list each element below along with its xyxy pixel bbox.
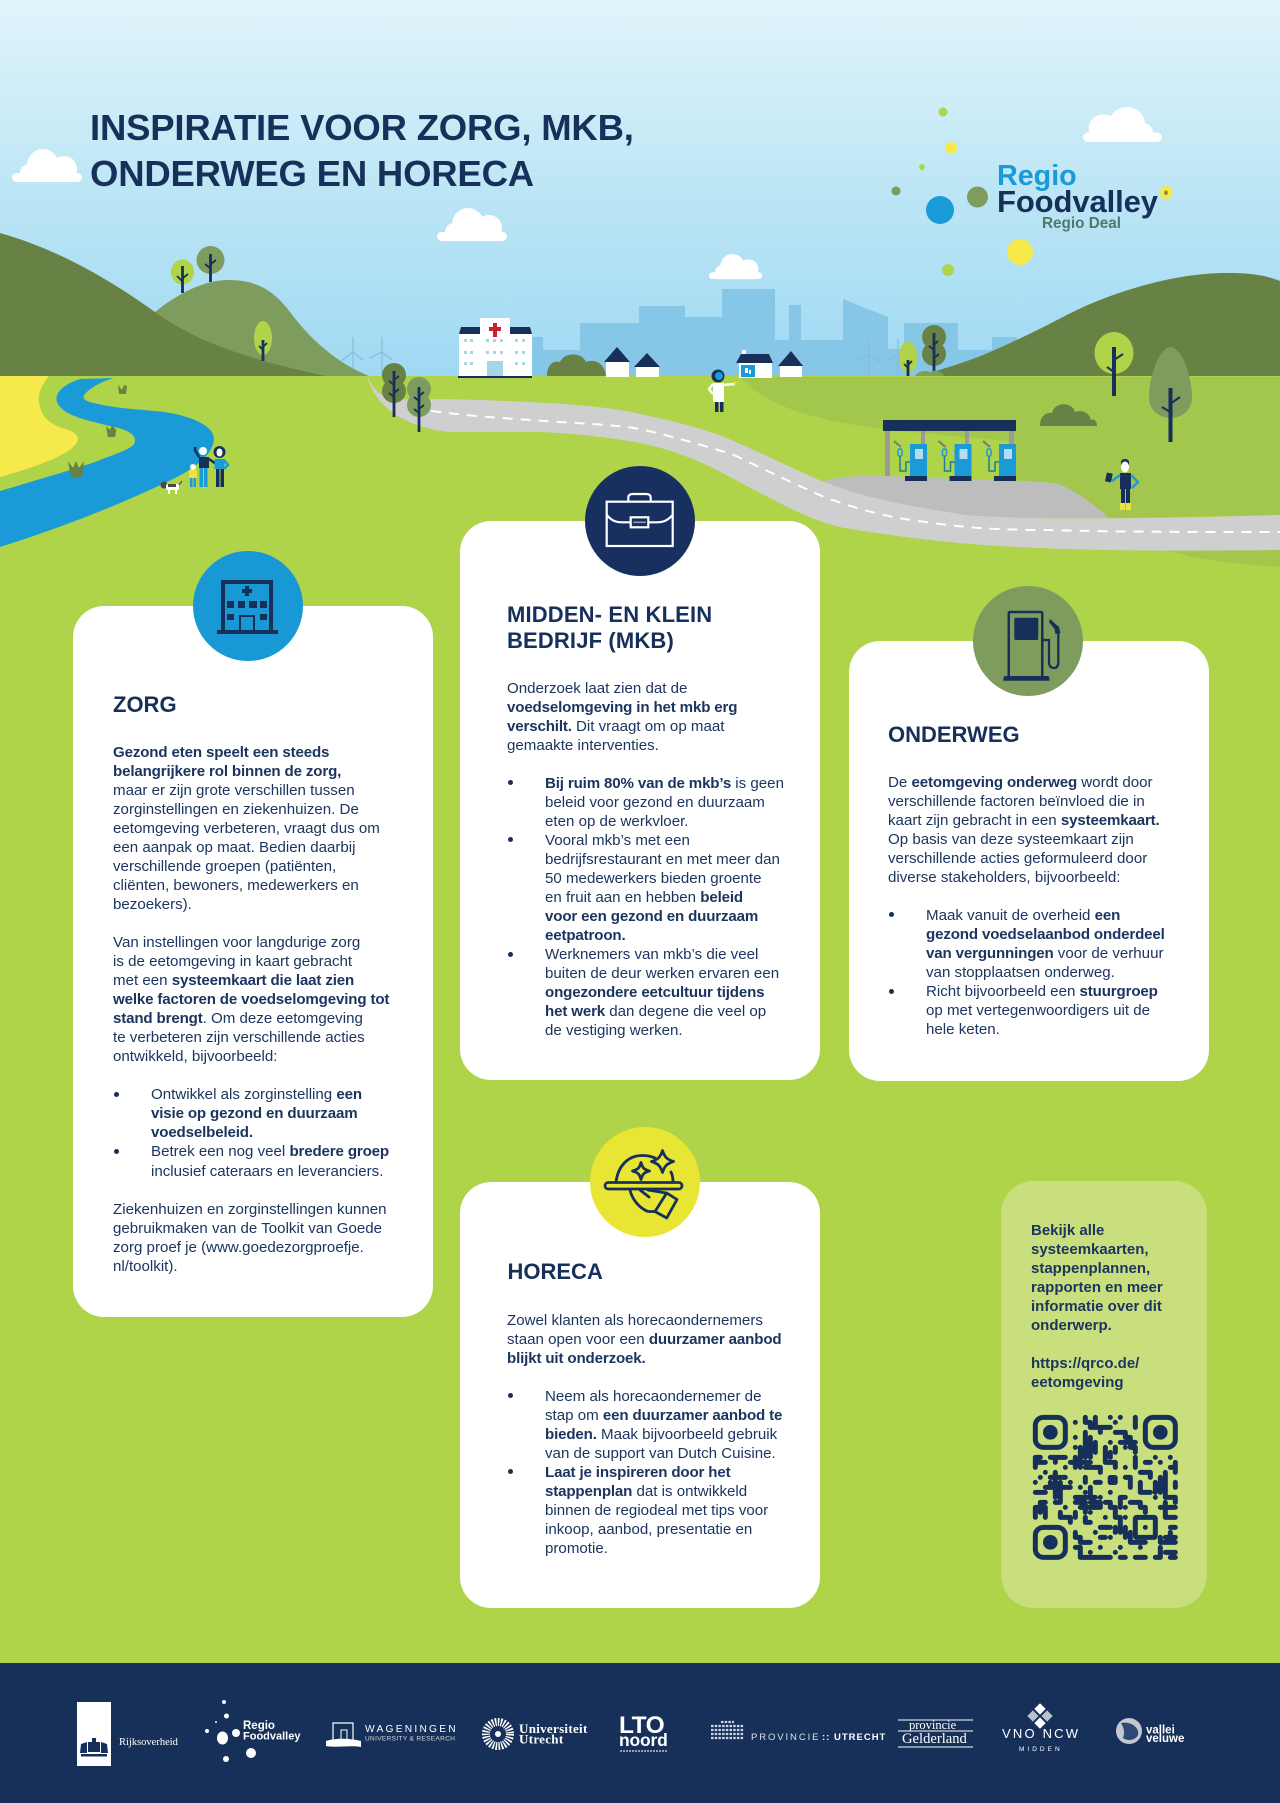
logo: Provincie Gelderland: Gelderland: [902, 1731, 968, 1747]
trees on left hills: [171, 246, 272, 361]
text: zorg body: voedselbeleid.: [151, 1124, 253, 1141]
logo: Provincie Utrecht: PROVINCIE: [751, 1732, 820, 1743]
logo: Provincie Gelderland: provincie: [909, 1718, 957, 1732]
icon: serving tray: [590, 1127, 700, 1237]
person: scientist: [709, 370, 736, 412]
text: onderweg body: op met vertegenwoordigers uit de: [926, 1002, 1150, 1019]
logo: LTO Noord: noord: [619, 1730, 668, 1750]
title: ONDERWEG EN HORECA: [90, 152, 534, 194]
text: mkb body: bedrijfsrestaurant en met meer dan: [545, 851, 780, 868]
text: call to action: systeemkaarten,: [1031, 1241, 1149, 1258]
text: mkb body: verschilt. Dit vraagt om op maat: [507, 718, 724, 735]
logo: Rijksoverheid: [77, 1702, 179, 1766]
text: mkb body: buiten de deur werken ervaren een: [545, 965, 779, 982]
logo: Regio Foodvalley Regio Deal: ®: [1164, 190, 1169, 197]
text: onderweg body: gezond voedselaanbod onderdeel: [926, 926, 1165, 943]
wind turbines: [341, 337, 908, 376]
text: horeca body: blijkt uit onderzoek.: [507, 1350, 646, 1367]
logo: Regio Foodvalley Regio Deal: [892, 108, 1172, 276]
cloud near skyline: [709, 254, 762, 279]
footer: partner logos: [0, 1663, 1280, 1803]
text: mkb body: Onderzoek laat zien dat de: [507, 680, 687, 696]
text: horeca body: stappenplan dat is ontwikkeld: [545, 1483, 747, 1500]
logo: Regio Foodvalley: [205, 1700, 301, 1762]
panel: zorg: [73, 551, 433, 1317]
text: zorg body: gebruikmaken van de Toolkit van Goede: [113, 1220, 382, 1237]
text: mkb body: ongezondere eetcultuur tijdens: [545, 984, 764, 1001]
text: zorg body: maar er zijn grote verschillen tussen: [113, 782, 355, 799]
heading: onderweg: ONDERWEG: [888, 722, 1020, 747]
text: zorg body: is de eetomgeving in kaart gebracht: [113, 953, 352, 970]
logo: Vallei Veluwe: veluwe: [1146, 1733, 1184, 1745]
trees on right field: [1094, 332, 1192, 442]
illustration: landscape background: [0, 0, 1280, 567]
ground: [0, 376, 1280, 600]
text: zorg body: [113, 744, 390, 1275]
heading: mkb: [507, 602, 712, 652]
panel: QR call to action: [1001, 1181, 1207, 1608]
text: mkb body: voor een gezond en duurzaam: [545, 908, 758, 925]
text: horeca body: [507, 1312, 782, 1557]
text: mkb body: en fruit aan en hebben beleid: [545, 889, 743, 906]
text: mkb body: Bij ruim 80% van de mkb’s is geen: [545, 775, 784, 792]
logo: Vallei Veluwe: vallei: [1146, 1724, 1175, 1736]
text: call to action: informatie over dit: [1031, 1298, 1162, 1315]
panel: onderweg: [849, 586, 1209, 1081]
text: zorg body: Ontwikkel als zorginstelling een: [151, 1086, 362, 1103]
left hills: [0, 233, 369, 376]
text: horeca body: van de support van Dutch Cuisine.: [545, 1445, 776, 1462]
text: zorg body: Betrek een nog veel bredere groep: [151, 1143, 389, 1160]
text: onderweg body: Richt bijvoorbeeld een stuurgroep: [926, 983, 1158, 1000]
text: mkb body: beleid voor gezond en duurzaam: [545, 794, 765, 811]
text: call to action: rapporten en meer: [1031, 1279, 1163, 1296]
logo: Universiteit Utrecht: [486, 1721, 588, 1746]
right hill: [917, 273, 1280, 376]
text: horeca body: Zowel klanten als horecaondernemers: [507, 1312, 763, 1328]
text: zorg body: Ziekenhuizen en zorginstellingen kunnen: [113, 1201, 387, 1218]
text: zorg body: ontwikkeld, bijvoorbeeld:: [113, 1048, 277, 1065]
logo: LTO Noord: LTO: [619, 1712, 665, 1739]
text: zorg body: inclusief cateraars en leveranciers.: [151, 1163, 383, 1180]
text: onderweg body: van vergunningen voor de verhuur: [926, 945, 1164, 962]
logo: Universiteit Utrecht: Universiteit: [519, 1721, 588, 1736]
person: farmer with clipboard: [1105, 459, 1138, 510]
trees by road: [382, 363, 431, 432]
text: zorg body: eetomgeving verbeteren, vraagt dus om: [113, 820, 380, 837]
icon: hospital: [193, 551, 303, 661]
text: call to action: [1031, 1222, 1163, 1391]
city skyline: [531, 289, 1017, 376]
logo: Wageningen University & Research: [326, 1723, 458, 1747]
hospital building: [458, 318, 532, 378]
text: zorg body: belangrijkere rol binnen de zorg,: [113, 763, 341, 780]
cloud left: [12, 149, 82, 182]
text: onderweg body: De eetomgeving onderweg wordt door: [888, 774, 1153, 790]
panel: horeca: [460, 1127, 820, 1608]
text: zorg body: Gezond eten speelt een steeds: [113, 744, 329, 760]
text: horeca body: Laat je inspireren door het: [545, 1464, 730, 1481]
panel: mkb: [460, 466, 820, 1080]
text: onderweg body: [888, 774, 1165, 1038]
text: horeca body: promotie.: [545, 1540, 608, 1557]
text: zorg body: met een systeemkaart die laat zien: [113, 972, 354, 989]
text: onderweg body: verschillende factoren beïnvloed die in: [888, 793, 1145, 810]
text: mkb body: eetpatroon.: [545, 927, 626, 944]
text: mkb body: voedselomgeving in het mkb erg: [507, 699, 737, 716]
grass tufts: [68, 385, 127, 477]
text: onderweg body: Maak vanuit de overheid een: [926, 907, 1120, 924]
text: mkb body: 50 medewerkers bieden groente: [545, 870, 761, 887]
houses: [604, 347, 803, 378]
QR code: [1032, 1414, 1178, 1560]
text: zorg body: cliënten, bewoners, medewerkers en: [113, 877, 359, 894]
logo: Wageningen University & Research: UNIVERSITY & RESEARCH: [365, 1736, 455, 1742]
small bush behind hill: [915, 371, 944, 376]
logo: LTO Noord: [619, 1712, 668, 1751]
bush near houses: [547, 354, 606, 376]
cloud centre: [437, 208, 507, 241]
text: onderweg body: van stopplaatsen onderweg.: [926, 964, 1115, 981]
road centre dashes: [431, 411, 1280, 532]
text: mkb body: Werknemers van mkb’s die veel: [545, 946, 758, 963]
text: onderweg body: diverse stakeholders, bijvoorbeeld:: [888, 869, 1120, 886]
bush right: [1040, 404, 1097, 426]
text: call to action: eetomgeving: [1031, 1374, 1124, 1391]
logo: VNO-NCW Midden: MIDDEN: [1019, 1746, 1063, 1753]
text: horeca body: staan open voor een duurzamer aanbod: [507, 1331, 781, 1348]
icon: fuel pump: [973, 586, 1083, 696]
heading: zorg: ZORG: [113, 692, 177, 717]
logo: Provincie Utrecht: [711, 1722, 886, 1743]
field yellow: [0, 376, 78, 477]
heading: mkb: BEDRIJF (MKB): [507, 628, 674, 652]
logo: Rijksoverheid: Rijksoverheid: [119, 1737, 179, 1748]
trees near skyline: [899, 325, 946, 376]
text: onderweg body: kaart zijn gebracht in een systeemkaart.: [888, 812, 1160, 829]
text: mkb body: de vestiging werken.: [545, 1022, 683, 1039]
text: zorg body: visie op gezond en duurzaam: [151, 1105, 357, 1122]
logo: VNO-NCW Midden: [1002, 1703, 1080, 1753]
heading: horeca: HORECA: [508, 1259, 603, 1284]
text: zorg body: zorginstellingen en ziekenhuizen. De: [113, 801, 359, 818]
text: zorg body: bezoekers).: [113, 896, 192, 913]
text: zorg body: verschillende groepen (patiënten,: [113, 858, 336, 875]
text: call to action: onderwerp.: [1031, 1317, 1112, 1334]
river: [0, 378, 214, 547]
logo: Provincie Utrecht: :: UTRECHT: [822, 1732, 886, 1743]
text: horeca body: inkoop, aanbod, presentatie en: [545, 1521, 752, 1538]
title: INSPIRATIE VOOR ZORG, MKB,: [90, 107, 634, 148]
text: mkb body: eten op de werkvloer.: [545, 813, 688, 830]
logo: Regio Foodvalley: Foodvalley: [243, 1730, 301, 1742]
text: zorg body: een aanpak op maat. Bedien daarbij: [113, 839, 356, 856]
logo: Regio Foodvalley Regio Deal: Regio Deal: [1042, 215, 1121, 232]
text: call to action: Bekijk alle: [1031, 1222, 1104, 1239]
family with dog: [160, 446, 228, 494]
logo: Universiteit Utrecht: Utrecht: [519, 1732, 564, 1746]
logo: Regio Foodvalley Regio Deal: Foodvalley: [997, 184, 1159, 219]
petrol station forecourt: [823, 476, 1109, 518]
text: mkb body: gemaakte interventies.: [507, 737, 659, 754]
darker grass lower right: [1165, 550, 1280, 567]
text: mkb body: [507, 680, 784, 1039]
heading: mkb: MIDDEN- EN KLEIN: [507, 602, 712, 626]
logo: Regio Foodvalley: Regio: [243, 1720, 275, 1732]
logo: Provincie Gelderland: [898, 1718, 973, 1747]
text: zorg body: te verbeteren zijn verschillende acties: [113, 1029, 365, 1046]
text: horeca body: Neem als horecaondernemer de: [545, 1388, 761, 1405]
road: [367, 376, 1280, 551]
text: horeca body: stap om een duurzamer aanbod te: [545, 1407, 782, 1424]
icon: briefcase: [585, 466, 695, 576]
petrol station: [883, 420, 1016, 481]
text: horeca body: bieden. Maak bijvoorbeeld gebruik: [545, 1426, 777, 1443]
text: call to action: https://qrco.de/: [1031, 1355, 1139, 1372]
text: zorg body: welke factoren de voedselomgeving tot: [113, 991, 389, 1008]
title: [90, 107, 634, 194]
text: mkb body: Vooral mkb’s met een: [545, 832, 690, 849]
logo: Vallei Veluwe: [1116, 1718, 1184, 1745]
text: onderweg body: hele keten.: [926, 1021, 1000, 1038]
logo: Regio Foodvalley Regio Deal: Regio: [997, 160, 1077, 192]
logo: Wageningen University & Research: WAGENINGEN: [365, 1724, 458, 1735]
cloud right: [1083, 107, 1162, 142]
text: onderweg body: Op basis van deze systeemkaart zijn: [888, 831, 1134, 848]
darker grass slope: [740, 377, 1280, 518]
text: call to action: stappenplannen,: [1031, 1260, 1150, 1277]
text: zorg body: stand brengt. Om deze eetomgeving: [113, 1010, 363, 1027]
text: zorg body: nl/toolkit).: [113, 1258, 178, 1275]
text: mkb body: het werk dan degene die veel op: [545, 1003, 766, 1020]
text: onderweg body: verschillende acties geformuleerd door: [888, 850, 1147, 867]
text: zorg body: Van instellingen voor langdurige zorg: [113, 934, 360, 951]
text: zorg body: zorg proef je (www.goedezorgproefje.: [113, 1239, 364, 1256]
logo: VNO-NCW Midden: VNO NCW: [1002, 1726, 1080, 1741]
text: horeca body: binnen de regiodeal met tips voor: [545, 1502, 768, 1519]
